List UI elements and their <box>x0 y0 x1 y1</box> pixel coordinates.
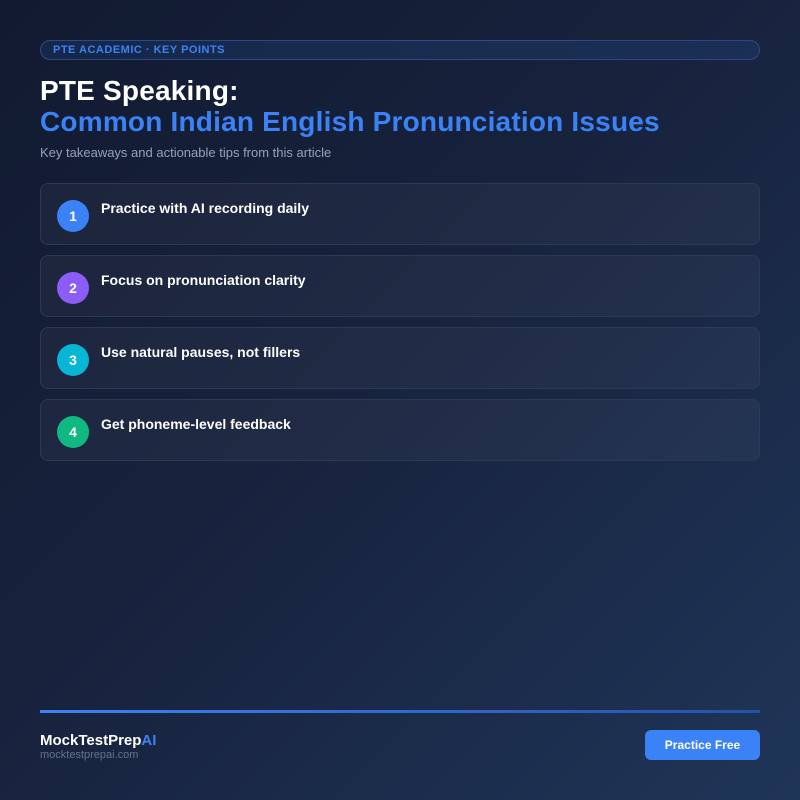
card 3: 3 <box>69 352 77 368</box>
title line 2: Common Indian English Pronunciation Issues <box>40 106 660 137</box>
brand: MockTestPrepAI <box>40 732 156 749</box>
button <box>645 730 760 760</box>
card 4 <box>40 399 760 461</box>
card 4: 4 <box>69 424 77 440</box>
button: Practice Free <box>665 738 740 752</box>
card 3 <box>40 327 760 389</box>
card 2: 2 <box>69 280 77 296</box>
title line 1: PTE Speaking: <box>40 75 239 106</box>
card 3: Use natural pauses, not fillers <box>101 344 300 360</box>
card 1 <box>40 183 760 245</box>
card 4: Get phoneme-level feedback <box>101 416 291 432</box>
url: mocktestprepai.com <box>40 749 138 761</box>
subtitle: Key takeaways and actionable tips from this article <box>40 145 331 160</box>
footer divider <box>40 710 760 713</box>
card 1: 1 <box>69 208 77 224</box>
card 1: Practice with AI recording daily <box>101 200 309 216</box>
card 2 <box>40 255 760 317</box>
tag pill <box>40 40 760 60</box>
tag pill: PTE ACADEMIC · KEY POINTS <box>53 44 225 56</box>
card 2: Focus on pronunciation clarity <box>101 272 306 288</box>
